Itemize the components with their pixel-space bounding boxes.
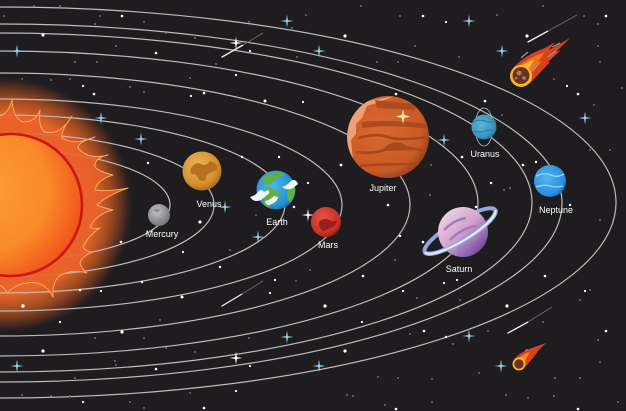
sun [0,100,128,297]
planet: Neptune [534,165,573,215]
sun glow [0,75,135,335]
sun rays [0,100,128,297]
planet: Mars: Mars [318,240,338,250]
planet: Mars [311,207,341,250]
planet: Jupiter: Jupiter [369,183,397,193]
planet: Mercury: Mercury [146,229,179,239]
planet: Earth [250,170,298,227]
Saturn ring [425,210,500,261]
sun disc [0,134,82,276]
planet: Saturn: Saturn [446,264,472,274]
planet: Venus: Venus [196,199,222,209]
planet: Neptune: Neptune [539,205,573,215]
shooting star streaks [222,15,577,333]
planet: Saturn [420,201,500,274]
small comet [512,343,546,370]
planet: Mercury [146,204,179,239]
planet: Uranus [470,108,500,159]
planet: Venus [182,152,222,209]
planet: Earth: Earth [266,217,288,227]
planet: Jupiter [347,96,430,193]
planet: Uranus: Uranus [470,149,500,159]
large comet [510,38,570,87]
